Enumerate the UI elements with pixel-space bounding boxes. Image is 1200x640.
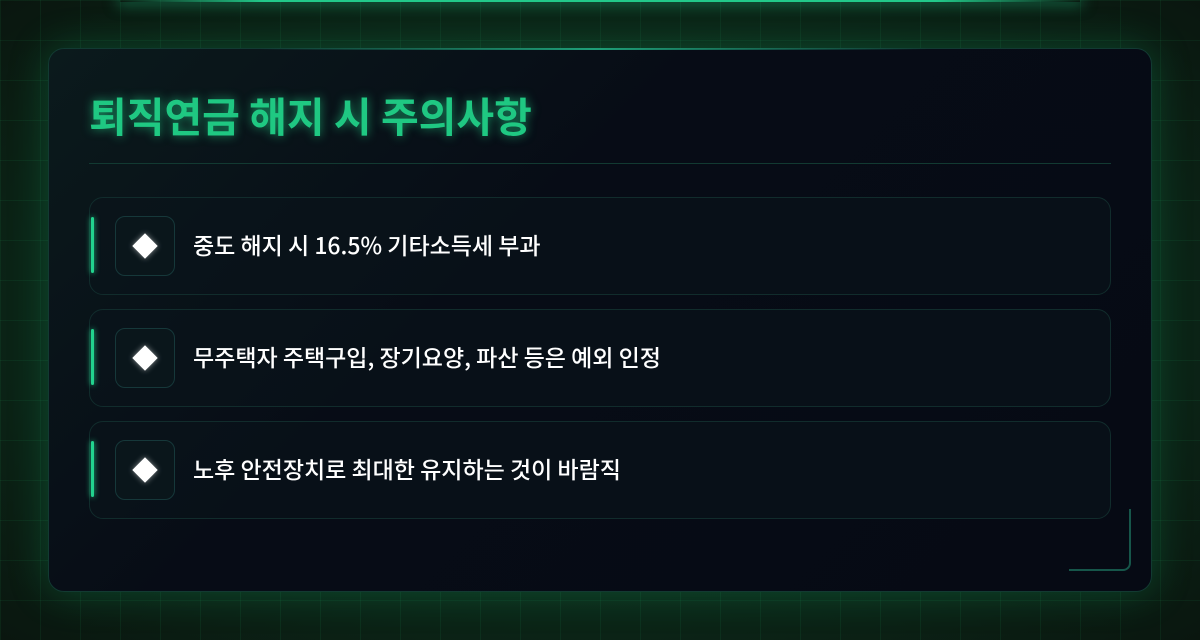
- text 1: 중도 해지 시 16.5% 기타소득세 부과: [193, 227, 541, 261]
- item 2: [89, 309, 1111, 407]
- text 2: 무주택자 주택구입, 장기요양, 파산 등은 예외 인정: [193, 339, 661, 373]
- icon: diamond: [115, 216, 175, 276]
- panel: main card: [48, 48, 1152, 592]
- title: 퇴직연금 해지 시 주의사항: [89, 84, 532, 144]
- icon: diamond: [115, 440, 175, 500]
- icon: diamond: [115, 328, 175, 388]
- text 3: 노후 안전장치로 최대한 유지하는 것이 바람직: [193, 451, 621, 485]
- item 1: [89, 197, 1111, 295]
- item 3: [89, 421, 1111, 519]
